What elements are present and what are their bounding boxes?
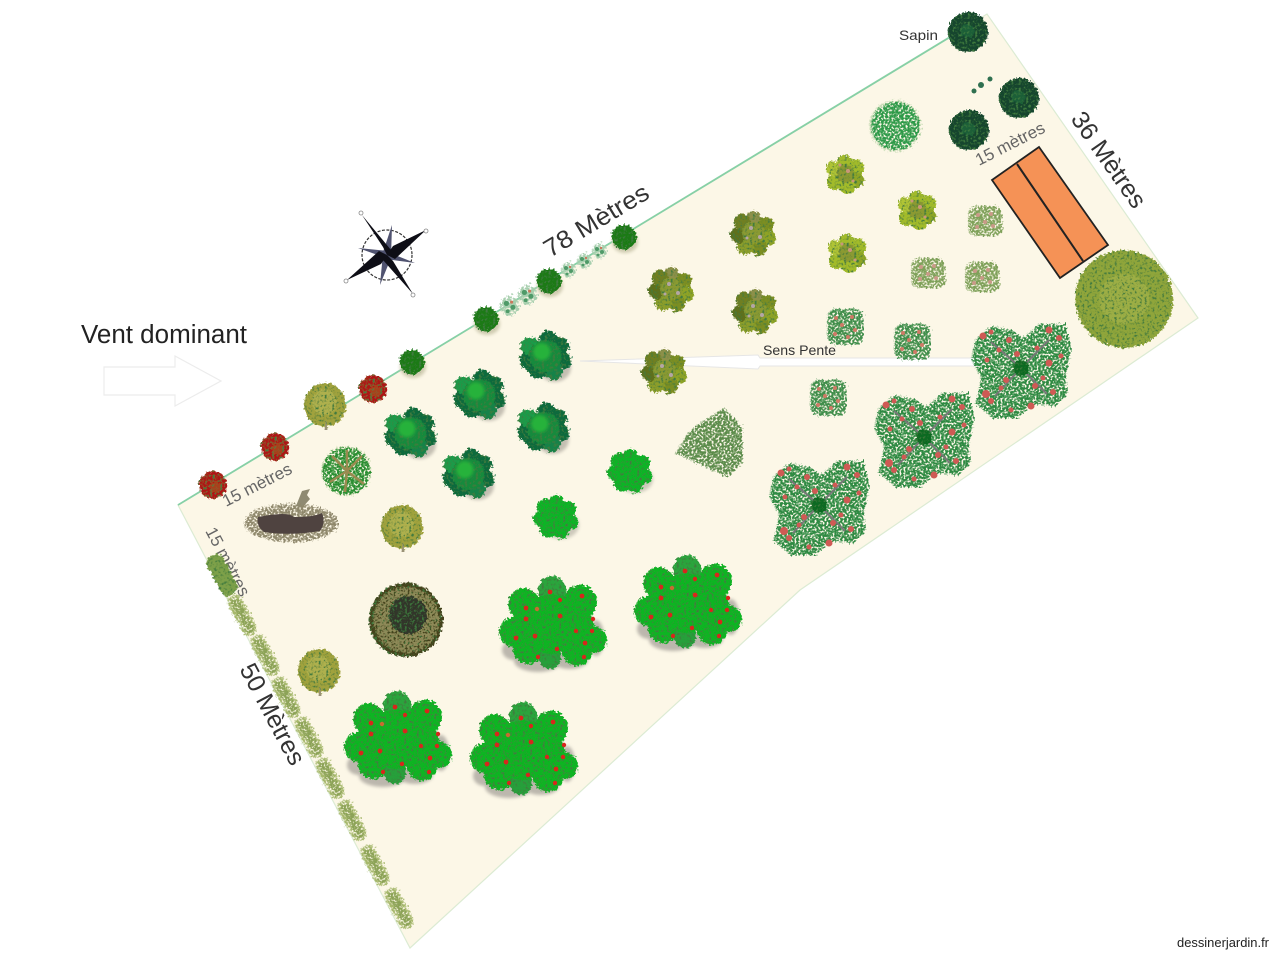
red shrubs on boundary xyxy=(199,375,387,499)
label: sapin: Sapin xyxy=(899,27,938,43)
label: slope: Sens Pente xyxy=(763,342,836,358)
dimension: 36 metres: 36 Mètres xyxy=(1065,106,1152,214)
orange shed xyxy=(992,147,1108,278)
lime rosettes xyxy=(826,155,936,273)
dark shrub xyxy=(369,583,443,657)
label: 15 metres shed: 15 mètres xyxy=(972,118,1048,170)
label: 15 metres left edge: 15 mètres xyxy=(201,524,254,600)
olive bushes xyxy=(298,383,423,696)
apple trees xyxy=(344,555,742,798)
dimension: 78 metres: 78 Mètres xyxy=(539,178,654,263)
bright green rosettes xyxy=(533,449,653,539)
small blossom shrubs xyxy=(810,309,930,416)
large round tree xyxy=(1075,250,1173,348)
white-flowered shrub xyxy=(869,100,921,152)
hedge row along left edge xyxy=(204,551,416,931)
wind label: Vent dominant xyxy=(81,321,247,349)
fir trees xyxy=(948,12,1039,150)
label: 15 metres top-left: 15 mètres xyxy=(219,459,295,511)
white-green shrub xyxy=(321,446,371,496)
credit: dessinerjardin.fr xyxy=(1177,935,1270,950)
pond xyxy=(244,489,338,542)
slope arrow xyxy=(580,355,982,369)
garden plot xyxy=(178,14,1198,948)
compass rose xyxy=(344,211,428,297)
dark green rosettes xyxy=(385,331,571,500)
boundary line xyxy=(178,31,960,505)
wind arrow xyxy=(104,356,221,406)
tiny firs xyxy=(972,76,992,94)
large blossom shrubs xyxy=(769,324,1071,555)
pale blossom shrubs xyxy=(911,206,1002,292)
olive rosettes xyxy=(641,211,778,394)
small shrubs on boundary xyxy=(499,244,606,316)
green hedge shrubs on boundary xyxy=(400,224,638,378)
triangular shrub xyxy=(675,408,742,477)
dimension: 50 metres: 50 Mètres xyxy=(234,659,311,770)
